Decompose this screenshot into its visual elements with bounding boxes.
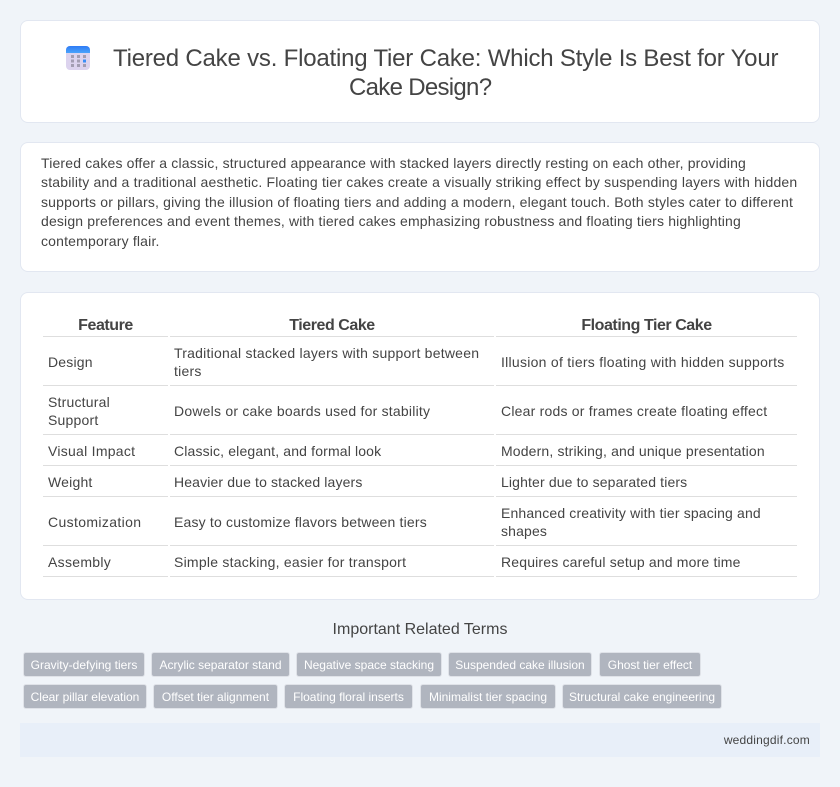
panel: description — [20, 142, 820, 272]
table header — [43, 317, 797, 337]
footer — [20, 723, 820, 757]
table row: customization: Customization — [48, 514, 141, 530]
panel: header — [20, 20, 820, 123]
table row: structural support: Support — [48, 412, 98, 428]
table row: structural support: Dowels or cake boards used for stability — [174, 403, 430, 419]
description text — [41, 154, 797, 249]
table row: weight: Weight — [48, 474, 93, 490]
table row: design: Traditional stacked layers with support between — [174, 345, 479, 361]
icon: calendar — [66, 46, 90, 70]
description text: supports or pillars, giving the illusion of floating tiers and adding a modern, elegant touch. Both styles cater to different — [41, 194, 793, 210]
description text: contemporary flair. — [41, 233, 160, 249]
related terms tags: Ghost tier effect — [608, 658, 692, 672]
table row: assembly — [43, 554, 797, 577]
title: Cake Design? — [349, 74, 491, 101]
table row: assembly: Requires careful setup and more time — [501, 554, 741, 570]
table row: weight: Heavier due to stacked layers — [174, 474, 362, 490]
heading: related terms: Important Related Terms — [333, 621, 507, 638]
title: Tiered Cake vs. Floating Tier Cake: Which Style Is Best for Your — [113, 45, 778, 72]
related terms tags — [23, 652, 722, 709]
table row: weight: Lighter due to separated tiers — [501, 474, 687, 490]
table row: assembly: Assembly — [48, 554, 111, 570]
related terms tags: Negative space stacking — [304, 658, 434, 672]
table row: design: Illusion of tiers floating with hidden supports — [501, 354, 785, 370]
related terms tags: Suspended cake illusion — [455, 658, 585, 672]
description text: Tiered cakes offer a classic, structured appearance with stacked layers directly resting on each other, providing — [41, 154, 746, 170]
table row: design — [43, 345, 797, 386]
table row: customization — [43, 505, 797, 546]
footer source text: weddingdif.com — [724, 733, 810, 747]
title — [113, 45, 778, 101]
related terms tags: Structural cake engineering — [569, 690, 715, 704]
table row: customization: shapes — [501, 523, 547, 539]
related terms tags: Floating floral inserts — [293, 690, 404, 704]
table row: structural support — [43, 394, 797, 435]
table row: customization: Easy to customize flavors between tiers — [174, 514, 427, 530]
related terms tags: Gravity-defying tiers — [31, 658, 137, 672]
table header: Tiered Cake — [289, 317, 375, 334]
table row: design: tiers — [174, 363, 202, 379]
related terms tags: Clear pillar elevation — [31, 690, 139, 704]
table row: visual impact: Modern, striking, and unique presentation — [501, 443, 765, 459]
table row: design: Design — [48, 354, 93, 370]
table row: structural support: Structural — [48, 394, 110, 410]
table row: visual impact — [43, 443, 797, 466]
related terms tags: Offset tier alignment — [162, 690, 269, 704]
table header: Floating Tier Cake — [581, 317, 712, 334]
table header: Feature — [78, 317, 133, 334]
description text: stability and a traditional aesthetic. Floating tier cakes create a visually striking effect by suspending layers with hidden — [41, 174, 797, 190]
table row: weight — [43, 474, 797, 497]
table row: structural support: Clear rods or frames create floating effect — [501, 403, 767, 419]
table row: visual impact: Classic, elegant, and formal look — [174, 443, 381, 459]
related terms tags: Minimalist tier spacing — [429, 690, 547, 704]
panel: comparison table — [20, 292, 820, 600]
table row: assembly: Simple stacking, easier for transport — [174, 554, 406, 570]
table row: visual impact: Visual Impact — [48, 443, 135, 459]
related terms tags: Acrylic separator stand — [159, 658, 282, 672]
table row: customization: Enhanced creativity with tier spacing and — [501, 505, 761, 521]
description text: design preferences and event themes, with tiered cakes emphasizing robustness and floating tiers highlighting — [41, 213, 741, 229]
